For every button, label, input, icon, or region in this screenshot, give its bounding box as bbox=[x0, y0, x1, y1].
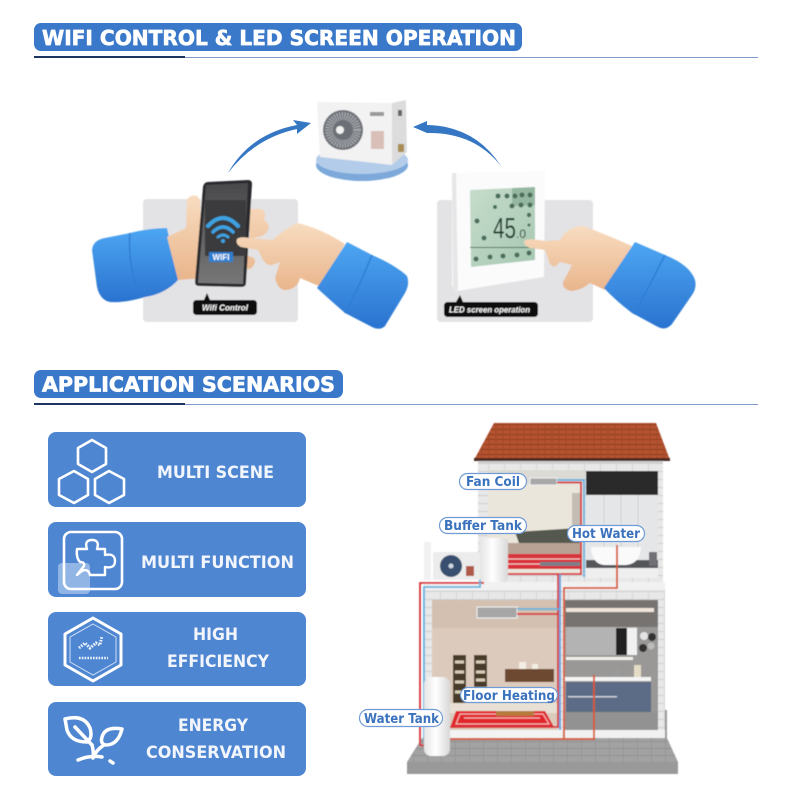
arrow: phone to heat pump bbox=[228, 120, 311, 173]
bathroom bbox=[586, 471, 658, 578]
icon: efficiency hexagon bbox=[65, 618, 121, 681]
icon: wifi signal bbox=[208, 218, 238, 242]
LCD icons bbox=[470, 192, 535, 262]
card: multi scene bbox=[48, 432, 306, 507]
lower floor wall bbox=[423, 590, 665, 738]
water pipes bbox=[420, 480, 617, 746]
buffer tank bbox=[480, 538, 508, 582]
icon: holding hand bbox=[167, 196, 269, 280]
roof bbox=[474, 423, 670, 464]
arrow: thermostat to heat pump bbox=[413, 121, 501, 166]
label: wifi control: Wifi Control bbox=[202, 302, 249, 312]
icon: pointing hand bbox=[236, 223, 345, 290]
label: water tank: Water Tank bbox=[364, 712, 439, 727]
label: buffer tank: Buffer Tank bbox=[444, 519, 522, 534]
house artwork bbox=[407, 423, 678, 774]
kitchen bbox=[565, 600, 665, 738]
panel: wifi control bbox=[92, 180, 408, 329]
icon: wall thermostat: .0 bbox=[516, 227, 526, 241]
label: LED screen operation: LED screen operation bbox=[449, 304, 530, 314]
ground pavement bbox=[407, 710, 678, 774]
icon: three hexagons bbox=[59, 440, 124, 503]
fan coil units bbox=[477, 478, 557, 618]
water tank bbox=[424, 677, 450, 756]
card: energy conservation bbox=[48, 702, 306, 776]
icon: right sleeve bbox=[604, 242, 696, 328]
card: multi scene: MULTI SCENE bbox=[157, 463, 274, 482]
heading: wifi control and LED screen operation: WIFI CONTROL & LED SCREEN OPERATION bbox=[42, 26, 516, 50]
icon: right sleeve bbox=[317, 242, 408, 329]
card: high efficiency: HIGH bbox=[193, 625, 238, 644]
outdoor unit bbox=[424, 542, 480, 580]
wifi tag: WIFI bbox=[213, 253, 229, 262]
icon: sprout bbox=[65, 718, 122, 763]
heading: application scenarios bbox=[34, 370, 758, 405]
label: wifi control bbox=[193, 293, 257, 315]
icon: smartphone bbox=[195, 180, 252, 287]
icon: puzzle piece bbox=[58, 532, 122, 594]
bedroom bbox=[488, 470, 584, 574]
card: energy conservation: ENERGY bbox=[178, 716, 249, 735]
card: energy conservation: CONSERVATION bbox=[146, 743, 286, 762]
panel: LED screen operation bbox=[437, 171, 696, 328]
label: hot water: Hot Water bbox=[572, 527, 641, 542]
card: multi function bbox=[48, 522, 306, 597]
upper floor wall bbox=[478, 460, 663, 584]
label: fan coil: Fan Coil bbox=[466, 475, 520, 490]
card: multi function: MULTI FUNCTION bbox=[141, 553, 294, 572]
icon: left sleeve bbox=[92, 228, 178, 302]
living room bbox=[432, 600, 562, 738]
card: high efficiency bbox=[48, 612, 306, 686]
heading: application scenarios: APPLICATION SCENARIOS bbox=[42, 372, 335, 396]
icon: wall thermostat bbox=[452, 171, 545, 291]
house cutaway illustration bbox=[360, 423, 678, 774]
label: floor heating: Floor Heating bbox=[463, 689, 555, 704]
heading: wifi control and LED screen operation bbox=[34, 23, 758, 58]
label: LED screen operation bbox=[444, 295, 538, 317]
LCD temperature: 45 bbox=[493, 213, 516, 245]
icon: pointing hand bbox=[524, 226, 632, 291]
floor heating coil bbox=[450, 711, 554, 728]
card: high efficiency: EFFICIENCY bbox=[167, 652, 270, 671]
floor slab bbox=[423, 582, 665, 592]
icon: outdoor heat pump unit bbox=[316, 100, 408, 181]
